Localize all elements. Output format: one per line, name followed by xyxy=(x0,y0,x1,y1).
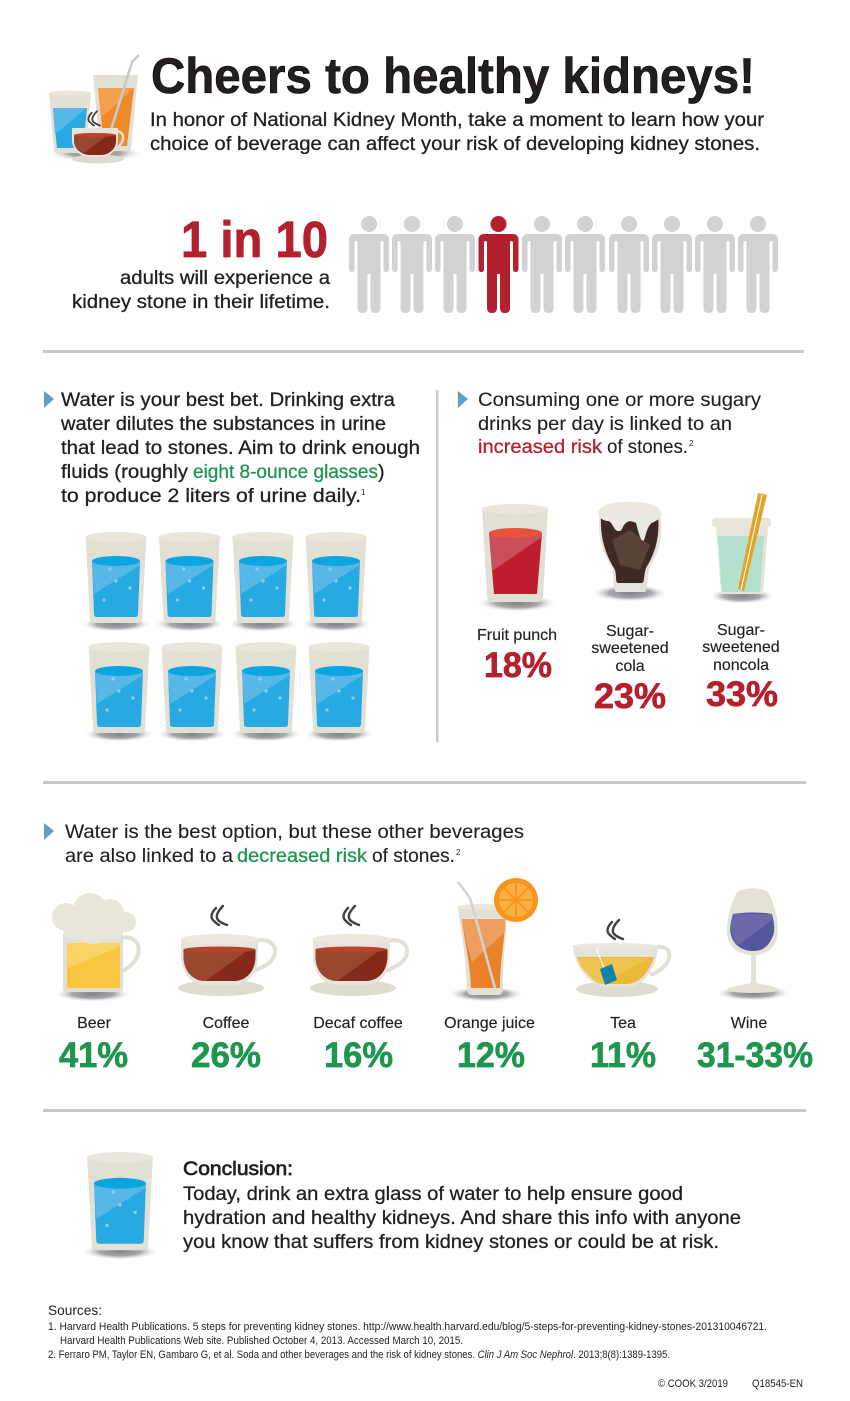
drink: orange juice 12% xyxy=(444,878,538,1075)
text block: other beverages: decreased risk xyxy=(237,845,367,867)
drink: decaf coffee 16%: 16% xyxy=(324,1036,393,1075)
copyright and code: © COOK 3/2019 xyxy=(658,1378,728,1390)
conclusion text: you know that suffers from kidney stones or could be at risk. xyxy=(183,1231,719,1253)
statistic: 1 in 10: adults will experience a xyxy=(120,267,330,289)
drink: beer 41%: Beer xyxy=(77,1015,112,1032)
drink: coffee 26% xyxy=(178,906,275,1075)
pictogram: 1 in 10 people xyxy=(349,216,778,313)
drink: sugar-sweetened cola 23%: Sugar- xyxy=(606,623,654,640)
text block: sugary drinks: increased risk xyxy=(478,436,602,458)
conclusion text: hydration and healthy kidneys. And share this info with anyone xyxy=(183,1207,741,1229)
copyright and code: Q18545-EN xyxy=(752,1378,803,1390)
sources xyxy=(48,1302,767,1361)
drink: coffee 26%: Coffee xyxy=(203,1015,250,1032)
sources: Harvard Health Publications Web site. Published October 4, 2013. Accessed March 10, 2015. xyxy=(60,1335,463,1347)
icon: beer mug xyxy=(52,893,139,1002)
drink: sugar-sweetened noncola 33%: Sugar- xyxy=(717,622,765,639)
icon: tea cup with tea bag xyxy=(572,920,669,997)
text block: sugary drinks: Consuming one or more sugary xyxy=(478,389,761,411)
intro text xyxy=(150,109,765,155)
intro text: In honor of National Kidney Month, take a moment to learn how your xyxy=(150,109,765,131)
drink: sugar-sweetened cola 23%: sweetened xyxy=(591,640,669,657)
drink: decaf coffee 16% xyxy=(310,906,407,1075)
drink: sugar-sweetened cola 23%: cola xyxy=(615,658,645,675)
text block: other beverages xyxy=(65,821,524,867)
conclusion text xyxy=(183,1158,741,1253)
drink: sugar-sweetened cola 23% xyxy=(591,502,669,716)
drink: tea 11%: 11% xyxy=(590,1036,656,1075)
drink: wine 31-33% xyxy=(697,888,813,1075)
drink: tea 11% xyxy=(572,920,669,1075)
conclusion text: Today, drink an extra glass of water to help ensure good xyxy=(183,1183,683,1205)
arrow: sugary drinks xyxy=(458,391,468,408)
drink: beer 41% xyxy=(52,893,139,1075)
intro text: choice of beverage can affect your risk of developing kidney stones. xyxy=(150,133,760,155)
icon: fruit punch glass xyxy=(477,504,557,612)
text block: water is your best bet xyxy=(60,389,420,507)
statistic: 1 in 10: 1 in 10 xyxy=(181,211,328,268)
text block: water is your best bet: to produce 2 liters of urine daily. xyxy=(61,485,361,507)
drink: fruit punch 18% xyxy=(477,504,557,685)
text block: sugary drinks xyxy=(478,389,761,458)
text block: sugary drinks: 2 xyxy=(689,439,694,448)
text block: water is your best bet: fluids (roughly xyxy=(61,461,188,483)
text block: other beverages: of stones. xyxy=(372,845,455,867)
icon: coffee cup xyxy=(178,906,275,996)
text block: sugary drinks: of stones. xyxy=(607,436,688,458)
drink: coffee 26%: 26% xyxy=(191,1036,261,1075)
arrow: water tip xyxy=(44,391,54,408)
drink: sugar-sweetened noncola 33% xyxy=(702,493,780,714)
header icon: water, juice and coffee xyxy=(47,55,143,164)
drink: wine 31-33%: 31-33% xyxy=(697,1036,813,1075)
drink: tea 11%: Tea xyxy=(610,1015,636,1032)
drink: orange juice 12%: 12% xyxy=(457,1036,525,1075)
text block: water is your best bet: 1 xyxy=(361,488,366,497)
drink: sugar-sweetened noncola 33%: sweetened xyxy=(702,639,780,656)
text block: water is your best bet: eight 8-ounce glasses xyxy=(193,461,378,483)
drink: beer 41%: 41% xyxy=(59,1036,128,1075)
title: Cheers to healthy kidneys! xyxy=(151,48,755,104)
text block: water is your best bet: that lead to stones. Aim to drink enough xyxy=(61,437,420,459)
text block: water is your best bet: water dilutes the substances in urine xyxy=(60,413,386,435)
icons: eight glasses of water xyxy=(80,532,375,742)
drink: sugar-sweetened cola 23%: 23% xyxy=(594,677,666,716)
icon: orange juice glass xyxy=(447,878,538,1002)
icon: conclusion glass of water xyxy=(81,1152,159,1260)
text block: other beverages: Water is the best option, but these other beverages xyxy=(65,821,524,843)
drink: fruit punch 18%: Fruit punch xyxy=(477,627,557,644)
sources: 1. Harvard Health Publications. 5 steps for preventing kidney stones. http://www.health.harvard.edu/blog/5-steps-for-preventing-kidney-stones-201310046721. xyxy=(48,1321,767,1333)
statistic: 1 in 10: kidney stone in their lifetime. xyxy=(72,291,330,313)
drink: sugar-sweetened noncola 33%: noncola xyxy=(713,657,769,674)
drink: orange juice 12%: Orange juice xyxy=(444,1015,535,1032)
text block: other beverages: 2 xyxy=(456,848,461,857)
text block: water is your best bet: ) xyxy=(378,461,384,483)
drink: decaf coffee 16%: Decaf coffee xyxy=(313,1015,403,1032)
conclusion text: Conclusion: xyxy=(183,1158,293,1180)
drink: sugar-sweetened noncola 33%: 33% xyxy=(706,675,778,714)
copyright and code xyxy=(658,1378,803,1390)
icon: decaf coffee cup xyxy=(310,906,407,996)
drink: wine 31-33%: Wine xyxy=(731,1015,767,1032)
text block: sugary drinks: drinks per day is linked to an xyxy=(478,413,732,435)
statistic: 1 in 10 xyxy=(72,211,330,313)
text block: water is your best bet: Water is your best bet. Drinking extra xyxy=(61,389,395,411)
drink: fruit punch 18%: 18% xyxy=(484,646,552,685)
icon: wine glass xyxy=(715,888,791,1001)
sources: 2. Ferraro PM, Taylor EN, Gambaro G, et al. Soda and other beverages and the risk of kidney stones. Clin J Am Soc Nephrol. 2013;8(8):1389-1395. xyxy=(48,1349,670,1361)
icon: cola glass xyxy=(591,502,669,602)
icon: noncola cup with straw xyxy=(708,493,776,604)
text block: other beverages: are also linked to a xyxy=(65,845,233,867)
arrow: other beverages xyxy=(44,823,54,840)
sources: Sources: xyxy=(48,1302,102,1318)
